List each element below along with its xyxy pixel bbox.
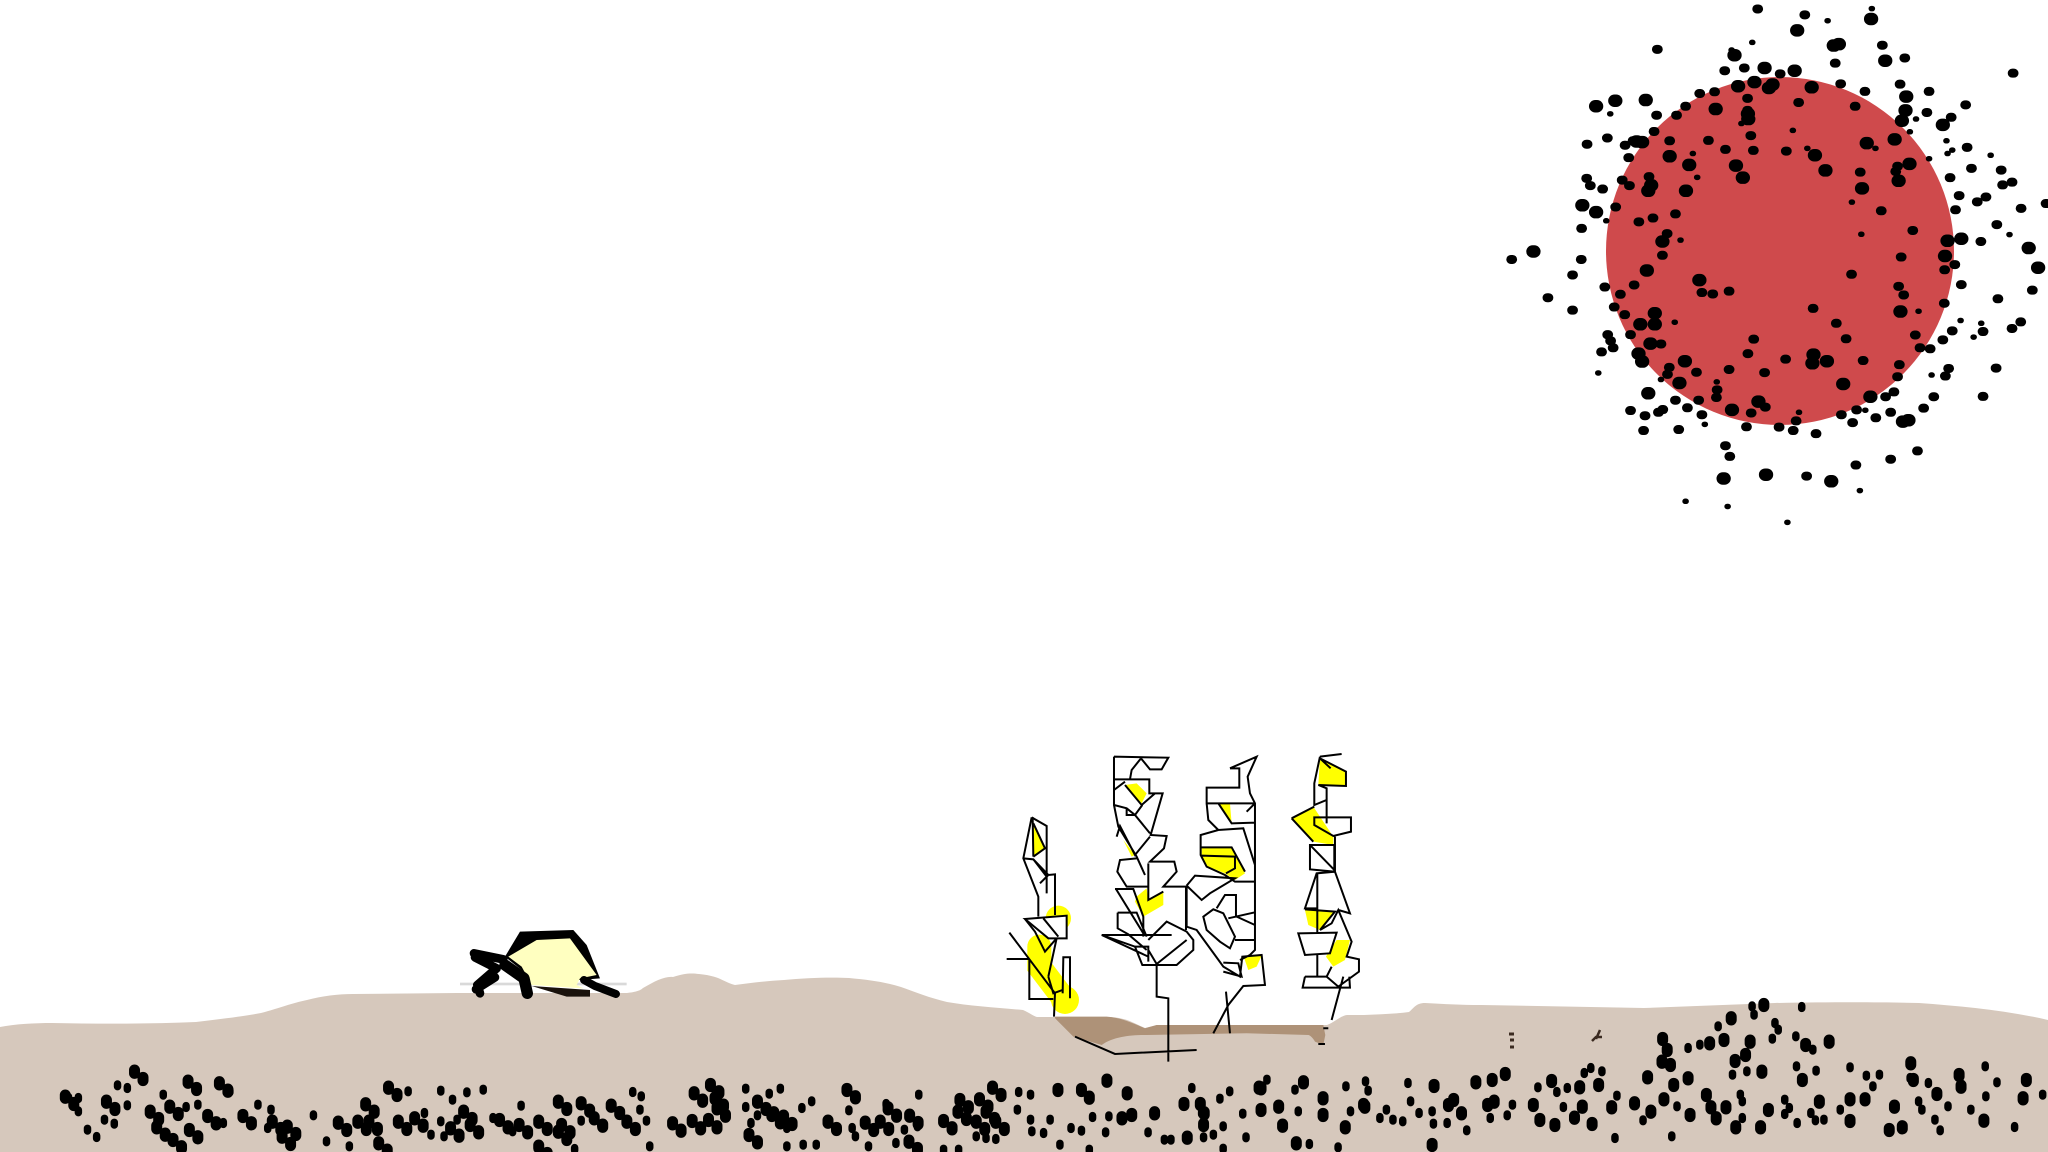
- turtle: [460, 930, 627, 997]
- plants and trough: [1007, 754, 1359, 1062]
- sun speckles: [1511, 9, 2047, 522]
- ground speckles: right half: [1031, 1003, 2043, 1151]
- sand ground: [0, 973, 2048, 1152]
- small scribble marks on the sand: [1509, 1030, 1602, 1047]
- plant 1: [1007, 817, 1079, 1017]
- turtle belly: [532, 986, 590, 997]
- turtle ground line: [460, 983, 627, 985]
- plant 3: [1187, 757, 1265, 1033]
- brown trough: [1055, 1017, 1325, 1045]
- ground speckles: left half: [65, 1070, 1019, 1152]
- turtle head and legs: [474, 953, 616, 994]
- turtle shell: [505, 930, 600, 980]
- sun: [1606, 77, 1954, 425]
- plant 4: [1292, 754, 1359, 1044]
- plant 2: [1075, 757, 1197, 1062]
